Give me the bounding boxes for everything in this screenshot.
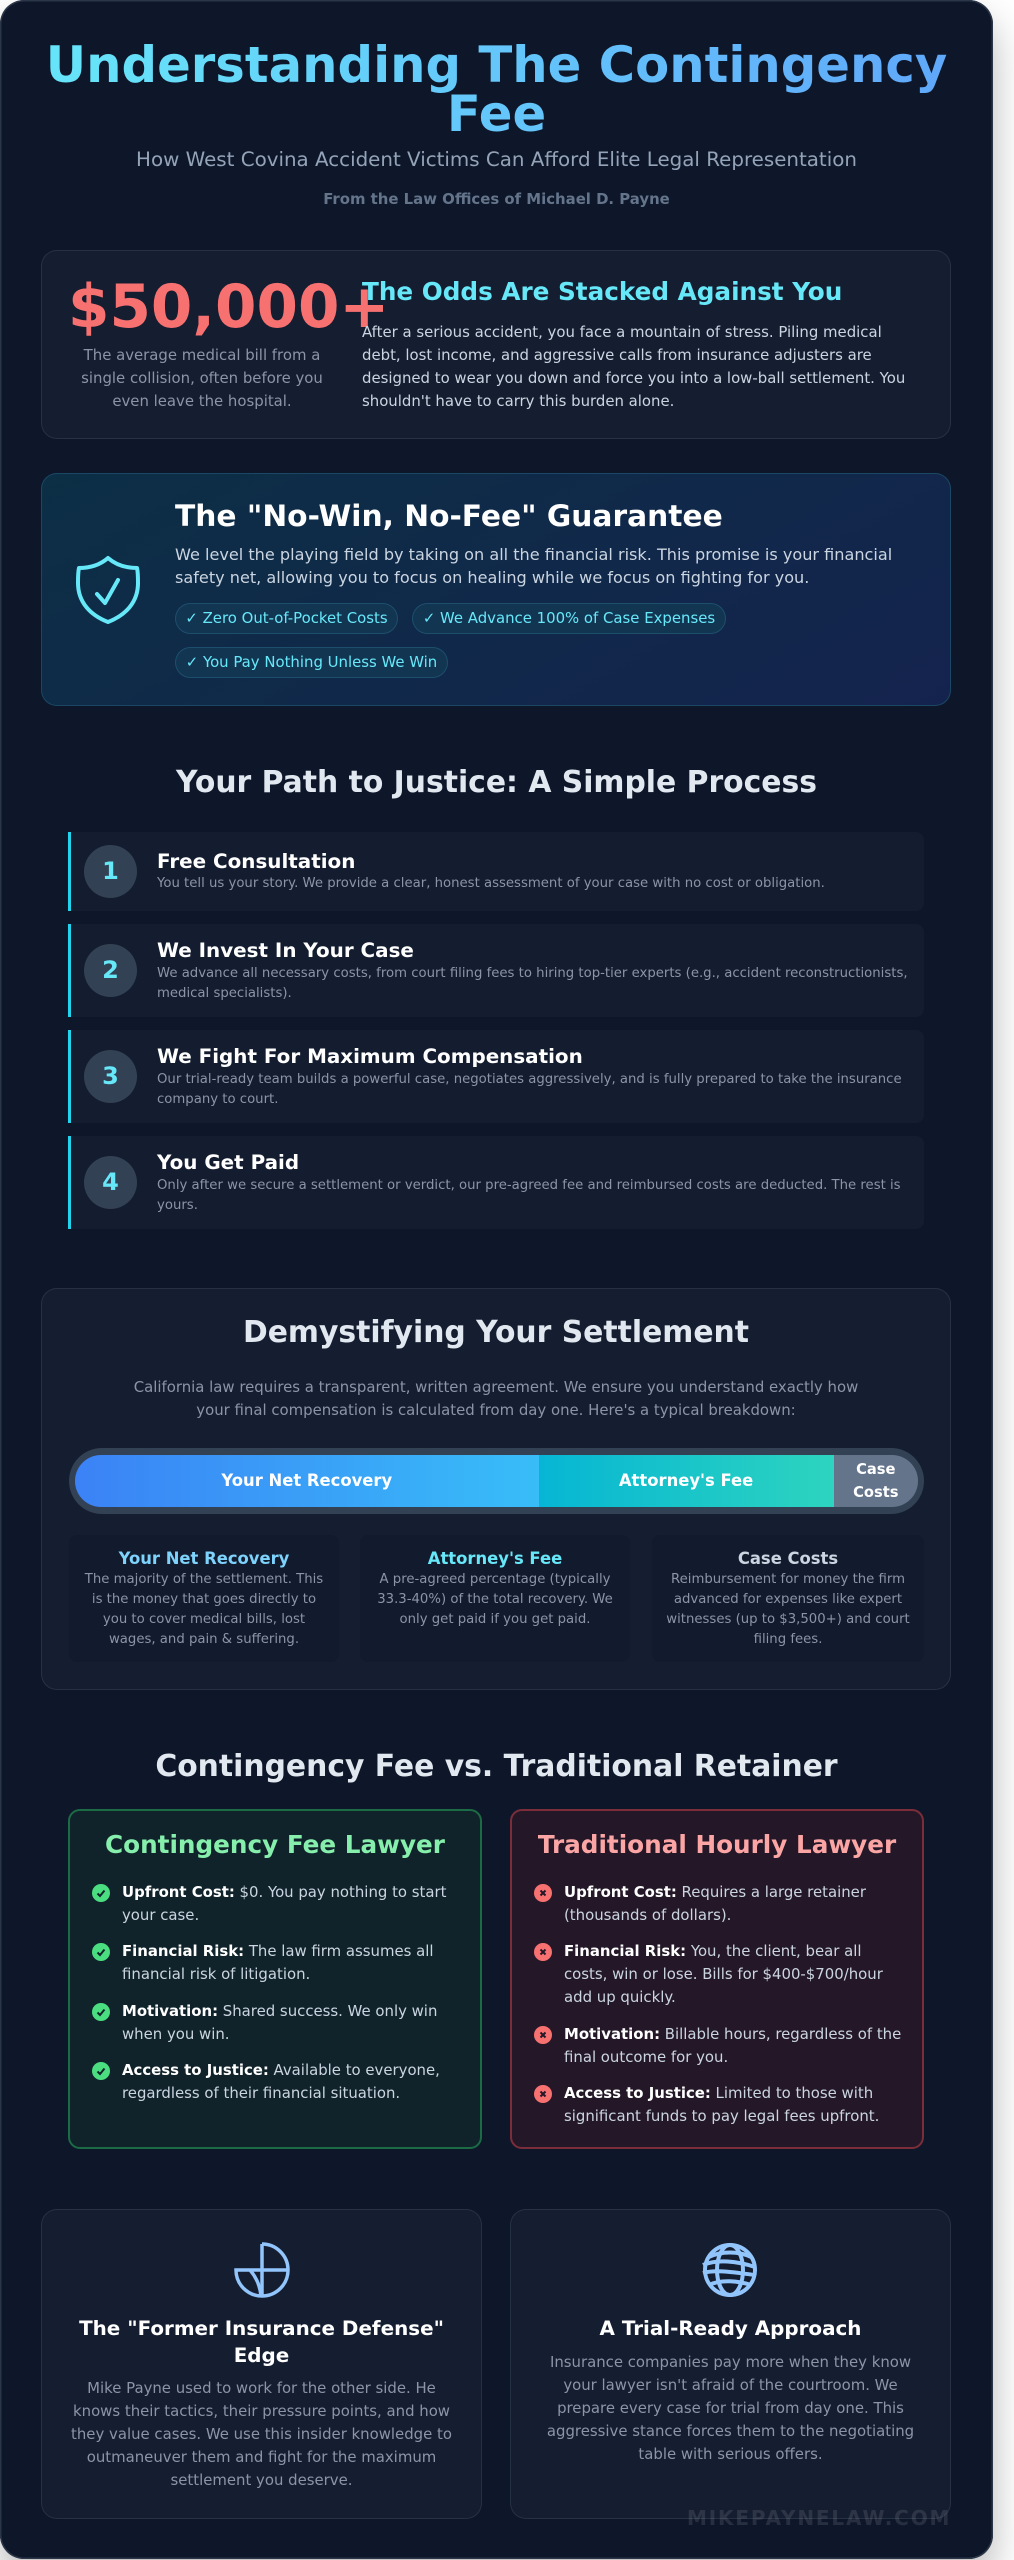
feature text: prepare every case for trial from day one. This <box>557 2399 904 2417</box>
guarantee paragraph: We level the playing field by taking on all the financial risk. This promise is your financial <box>175 545 892 564</box>
icon: check <box>92 1943 110 1961</box>
heading: process: Your Path to Justice: A Simple Process <box>176 765 817 800</box>
breakdown text: wages, and pain & suffering. <box>109 1632 299 1647</box>
breakdown text <box>84 1572 323 1647</box>
list item: upfront cost: Upfront Cost: $0. You pay nothing to start <box>122 1883 446 1901</box>
breakdown title: Case Costs <box>738 1549 838 1568</box>
breakdown text: filing fees. <box>754 1632 822 1647</box>
firm attribution: From the Law Offices of Michael D. Payne <box>323 190 670 208</box>
breakdown text <box>377 1572 613 1627</box>
breakdown text: Reimbursement for money the firm <box>671 1572 905 1587</box>
feature text <box>71 2379 452 2489</box>
watermark: MIKEPAYNELAW.COM <box>687 2506 951 2530</box>
step description <box>157 966 908 1001</box>
breakdown text: you to cover medical bills, lost <box>103 1612 305 1627</box>
list item: financial risk: Financial Risk: You, the client, bear all <box>564 1942 862 1960</box>
step description <box>157 1178 901 1213</box>
step title: Free Consultation <box>157 850 355 873</box>
stat caption <box>81 346 323 410</box>
title: Fee <box>447 85 546 143</box>
guarantee paragraph: safety net, allowing you to focus on healing while we focus on fighting for you. <box>175 568 809 587</box>
pill: pay nothing: ✓ You Pay Nothing Unless We Win <box>186 653 437 671</box>
feature text <box>547 2353 914 2463</box>
step description: Only after we secure a settlement or verdict, our pre-agreed fee and reimbursed costs are deducted. The rest is <box>157 1178 901 1193</box>
feature text: aggressive stance forces them to the negotiating <box>547 2422 914 2440</box>
segment: attorney fee: Attorney's Fee <box>619 1471 753 1490</box>
heading: comparison: Contingency Fee vs. Traditional Retainer <box>155 1749 838 1784</box>
breakdown text: only get paid if you get paid. <box>400 1612 590 1627</box>
step number 4: 4 <box>102 1168 119 1196</box>
breakdown text: witnesses (up to $3,500+) and court <box>666 1612 910 1627</box>
step title: We Fight For Maximum Compensation <box>157 1045 583 1068</box>
list item: financial risk: financial risk of litigation. <box>122 1965 310 1983</box>
step number 2: 2 <box>102 956 119 984</box>
breakdown text: A pre-agreed percentage (typically <box>380 1572 610 1587</box>
breakdown text: is the money that goes directly to <box>92 1592 316 1607</box>
step title: We Invest In Your Case <box>157 939 414 962</box>
list item: upfront cost <box>564 1883 866 1924</box>
settlement intro: California law requires a transparent, written agreement. We ensure you understand exactly how <box>134 1378 858 1396</box>
list item: access to justice <box>122 2061 440 2102</box>
list item: upfront cost: Upfront Cost: Requires a large retainer <box>564 1883 866 1901</box>
list item: access to justice: regardless of their financial situation. <box>122 2084 400 2102</box>
list item: upfront cost: (thousands of dollars). <box>564 1906 731 1924</box>
odds paragraph: designed to wear you down and force you into a low-ball settlement. You <box>362 369 905 387</box>
column title: Traditional Hourly Lawyer <box>538 1830 896 1859</box>
breakdown text: advanced for expenses like expert <box>674 1592 902 1607</box>
stat caption: even leave the hospital. <box>112 392 292 410</box>
step number 3 <box>84 1050 137 1103</box>
list item: upfront cost: your case. <box>122 1906 199 1924</box>
step description: yours. <box>157 1198 198 1213</box>
step number 1 <box>84 845 137 898</box>
icon: shield check <box>76 556 140 624</box>
guarantee heading: The "No-Win, No-Fee" Guarantee <box>175 499 723 534</box>
step number 1: 1 <box>102 857 119 885</box>
icon: x <box>534 1943 552 1961</box>
step 3 <box>68 1030 924 1123</box>
breakdown text: 33.3-40%) of the total recovery. We <box>377 1592 613 1607</box>
breakdown title: Your Net Recovery <box>119 1549 289 1568</box>
feature text: Insurance companies pay more when they know <box>550 2353 911 2371</box>
list item: motivation <box>122 2002 437 2043</box>
icon: x <box>534 2026 552 2044</box>
pill: zero out of pocket: ✓ Zero Out-of-Pocket Costs <box>185 609 388 627</box>
panel: traditional hourly lawyer <box>510 1809 924 2149</box>
list item: motivation: final outcome for you. <box>564 2048 728 2066</box>
feature text: settlement you deserve. <box>170 2471 353 2489</box>
odds paragraph <box>362 323 905 410</box>
feature text: Mike Payne used to work for the other side. He <box>87 2379 436 2397</box>
settlement heading: Demystifying Your Settlement <box>243 1315 749 1350</box>
step description <box>157 1072 902 1107</box>
feature title <box>79 2317 444 2367</box>
segment: attorney fee <box>539 1455 834 1507</box>
step number 4 <box>84 1156 137 1209</box>
icon: x <box>534 1884 552 1902</box>
list item: financial risk: costs, win or lose. Bills for $400-$700/hour <box>564 1965 883 1983</box>
icon: check <box>92 1884 110 1902</box>
panel: demystifying settlement <box>41 1288 951 1690</box>
feature title: Edge <box>234 2344 289 2367</box>
list item: upfront cost <box>122 1883 446 1924</box>
breakdown text: The majority of the settlement. This <box>85 1572 323 1587</box>
icon: globe <box>702 2243 757 2297</box>
odds paragraph: After a serious accident, you face a mountain of stress. Piling medical <box>362 323 882 341</box>
breakdown text <box>666 1572 910 1647</box>
step description: You tell us your story. We provide a clear, honest assessment of your case with no cost or obligation. <box>157 876 825 891</box>
list item: access to justice: Access to Justice: Available to everyone, <box>122 2061 440 2079</box>
icon: x <box>534 2085 552 2103</box>
list item: financial risk: Financial Risk: The law firm assumes all <box>122 1942 434 1960</box>
settlement intro: your final compensation is calculated from day one. Here's a typical breakdown: <box>196 1401 796 1419</box>
feature text: outmaneuver them and fight for the maximum <box>87 2448 436 2466</box>
list item: access to justice <box>564 2084 879 2125</box>
panel: odds stacked against you <box>41 250 951 439</box>
pill: advance expenses <box>412 603 726 634</box>
settlement intro <box>134 1378 858 1419</box>
list item: access to justice: significant funds to pay legal fees upfront. <box>564 2107 879 2125</box>
icon: check <box>92 2003 110 2021</box>
odds heading: The Odds Are Stacked Against You <box>362 277 842 306</box>
segment: case costs: Costs <box>853 1484 898 1501</box>
breakdown title: Attorney's Fee <box>428 1549 562 1568</box>
title <box>0 41 993 139</box>
step description: company to court. <box>157 1092 278 1107</box>
list item: motivation: when you win. <box>122 2025 230 2043</box>
panel: no-win no-fee guarantee <box>41 473 951 706</box>
step 1 <box>68 832 924 911</box>
list item: financial risk <box>122 1942 434 1983</box>
segment: case costs: Case <box>856 1461 895 1478</box>
pill: pay nothing <box>175 647 448 678</box>
panel: former insurance defense edge <box>41 2209 482 2519</box>
stat caption: The average medical bill from a <box>84 346 320 364</box>
guarantee paragraph <box>175 545 892 587</box>
pill: advance expenses: ✓ We Advance 100% of Case Expenses <box>423 609 715 627</box>
breakdown: case costs <box>652 1535 924 1662</box>
icon: quartered circle <box>234 2242 290 2298</box>
breakdown: attorney fee <box>360 1535 630 1662</box>
panel: contingency fee lawyer <box>68 1809 482 2149</box>
subtitle: How West Covina Accident Victims Can Afford Elite Legal Representation <box>136 148 857 171</box>
step number 2 <box>84 944 137 997</box>
list item: financial risk <box>564 1942 883 2006</box>
segment: net recovery: Your Net Recovery <box>221 1471 392 1490</box>
pill: zero out of pocket <box>175 603 398 634</box>
column title: Contingency Fee Lawyer <box>105 1830 445 1859</box>
segment: net recovery <box>75 1455 539 1507</box>
icon: check <box>92 2062 110 2080</box>
list item: financial risk: add up quickly. <box>564 1988 676 2006</box>
bar inner <box>75 1455 918 1507</box>
step number 3: 3 <box>102 1062 119 1090</box>
segment: case costs <box>834 1455 918 1507</box>
title: Understanding The Contingency <box>46 36 947 94</box>
odds paragraph: debt, lost income, and aggressive calls from insurance adjusters are <box>362 346 872 364</box>
list item: access to justice: Access to Justice: Limited to those with <box>564 2084 873 2102</box>
big stat: $50,000+: $50,000+ <box>68 273 389 342</box>
list item: motivation: Motivation: Shared success. We only win <box>122 2002 437 2020</box>
feature title: A Trial-Ready Approach <box>600 2317 861 2340</box>
odds paragraph: shouldn't have to carry this burden alone. <box>362 392 674 410</box>
breakdown: net recovery <box>69 1535 339 1662</box>
feature text: they value cases. We use this insider knowledge to <box>71 2425 452 2443</box>
feature title: The "Former Insurance Defense" <box>79 2317 444 2340</box>
step 2 <box>68 924 924 1017</box>
feature text: knows their tactics, their pressure points, and how <box>73 2402 450 2420</box>
list item: motivation: Motivation: Billable hours, regardless of the <box>564 2025 901 2043</box>
feature text: table with serious offers. <box>638 2445 823 2463</box>
list item: motivation <box>564 2025 901 2066</box>
step description: Our trial-ready team builds a powerful case, negotiates aggressively, and is fully prepared to take the insurance <box>157 1072 902 1087</box>
stat caption: single collision, often before you <box>81 369 323 387</box>
step title: You Get Paid <box>157 1151 299 1174</box>
step description: We advance all necessary costs, from court filing fees to hiring top-tier experts (e.g., accident reconstructionists, <box>157 966 908 981</box>
step 4 <box>68 1136 924 1229</box>
stacked settlement bar <box>69 1448 924 1514</box>
feature text: your lawyer isn't afraid of the courtroom. We <box>563 2376 898 2394</box>
step description: medical specialists). <box>157 986 292 1001</box>
panel: trial-ready approach <box>510 2209 951 2519</box>
